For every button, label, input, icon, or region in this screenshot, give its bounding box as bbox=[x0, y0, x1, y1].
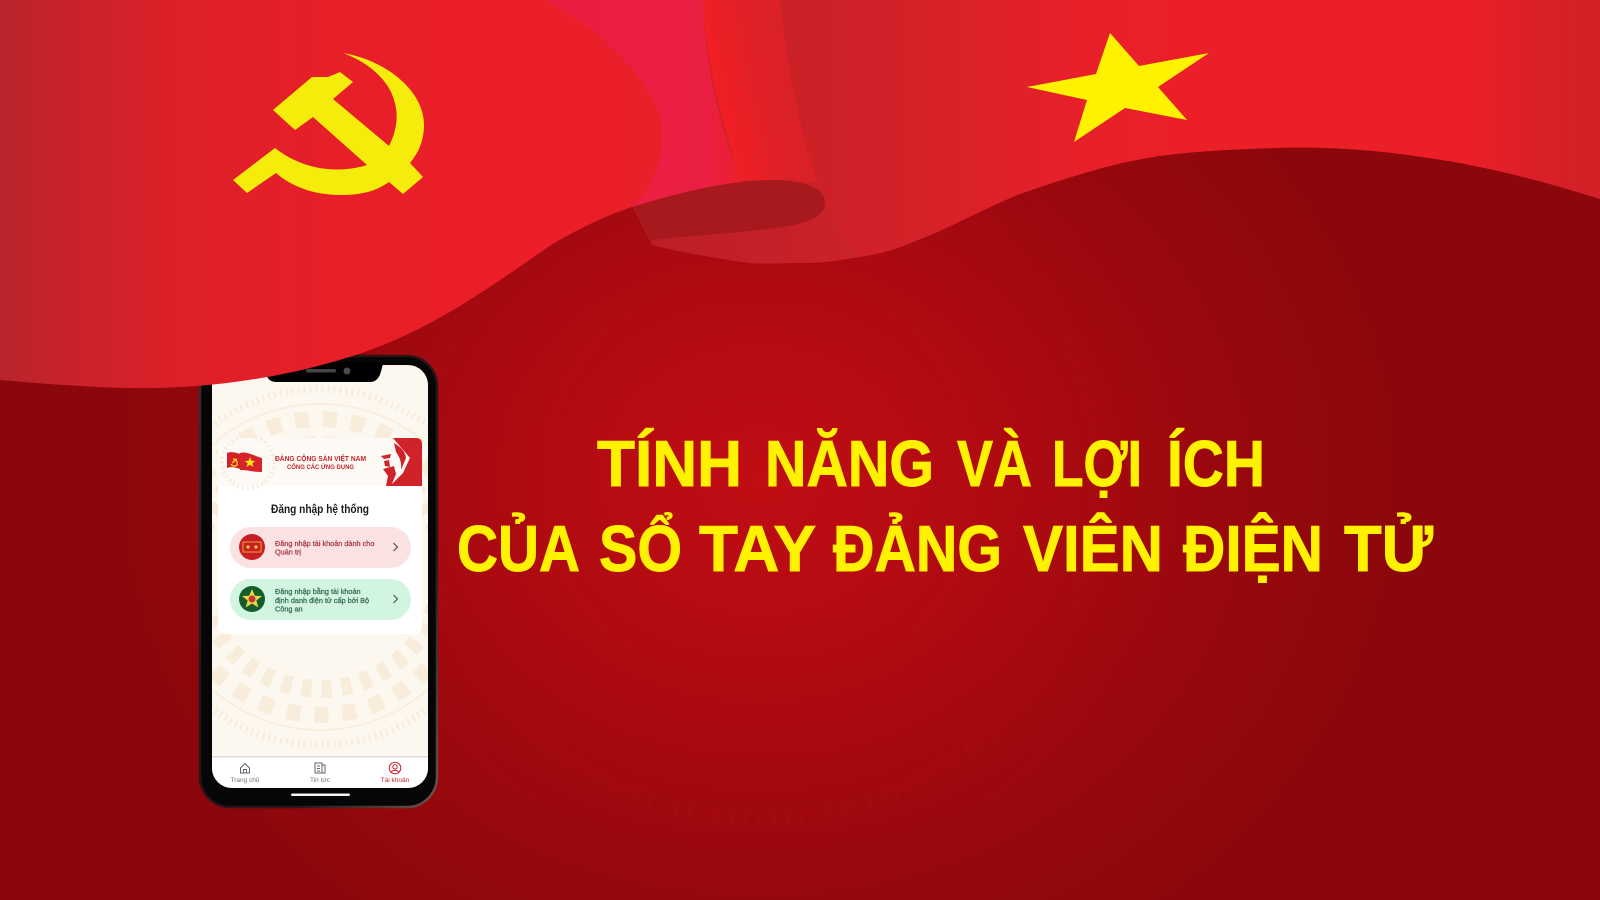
card heading: Đăng nhập hệ thống bbox=[271, 502, 369, 516]
title line 2: CỦA bbox=[457, 512, 580, 585]
chevron bbox=[394, 595, 398, 603]
admin login text: Quản trị bbox=[275, 548, 301, 556]
title bbox=[457, 427, 1433, 585]
app portal name: CỔNG CÁC ỨNG DỤNG bbox=[287, 464, 354, 471]
bottom navigation bar bbox=[212, 756, 428, 788]
right flag section bbox=[640, 0, 1600, 263]
title line 2: SỔ bbox=[599, 512, 682, 585]
speaker and camera bbox=[306, 368, 350, 374]
phone body bbox=[200, 356, 437, 807]
title line 1: NĂNG bbox=[765, 427, 934, 500]
title line 1: LỢI bbox=[1052, 427, 1142, 500]
police login text: định danh điện tử cấp bởi Bộ bbox=[275, 596, 369, 605]
icon: admin flag bbox=[239, 534, 265, 560]
left flag section bbox=[0, 0, 662, 388]
curl underside shadow bbox=[632, 180, 825, 246]
curl highlight bbox=[703, 0, 817, 182]
admin login text: Đăng nhập tài khoản dành cho bbox=[275, 539, 374, 548]
portrait emblem bbox=[381, 438, 422, 486]
title line 1: TÍNH bbox=[597, 427, 742, 500]
icon: twin flags bbox=[227, 452, 262, 472]
icon: home bbox=[240, 764, 250, 773]
title line 2: TAY bbox=[699, 512, 816, 585]
chevron bbox=[394, 543, 398, 551]
icon: hammer and sickle bbox=[233, 53, 424, 195]
label: Tin tức: Tin tức bbox=[310, 777, 331, 784]
title line 2: TỬ bbox=[1344, 512, 1433, 585]
label: Tài khoản: Tài khoản bbox=[381, 777, 410, 784]
app organization name: ĐẢNG CỘNG SẢN VIỆT NAM bbox=[275, 454, 366, 463]
admin login button bbox=[230, 527, 411, 568]
phone notch bbox=[262, 362, 384, 382]
home indicator bbox=[291, 794, 350, 796]
phone screen bbox=[212, 365, 428, 788]
icon: account bbox=[389, 762, 401, 774]
title line 2: VIÊN bbox=[1023, 512, 1163, 585]
title line 1 bbox=[597, 427, 1265, 500]
curl lower flap bbox=[652, 203, 860, 263]
waving party flag banner bbox=[0, 0, 1600, 388]
icon: yellow star bbox=[1027, 33, 1209, 142]
police identity login button bbox=[230, 579, 411, 620]
phone mockup bbox=[198, 354, 438, 808]
title line 2: ĐẢNG bbox=[833, 512, 1002, 585]
title line 1: VÀ bbox=[957, 427, 1032, 500]
title line 1: ÍCH bbox=[1167, 427, 1265, 500]
card header bbox=[218, 436, 422, 488]
curl pink fold bbox=[545, 0, 742, 207]
icon: news bbox=[315, 763, 325, 773]
police login text: Đăng nhập bằng tài khoản bbox=[275, 587, 361, 596]
icon: police badge bbox=[239, 586, 265, 612]
police login text: Công an bbox=[275, 604, 303, 614]
title line 2: ĐIỆN bbox=[1183, 512, 1323, 585]
label: Trang chủ: Trang chủ bbox=[230, 776, 260, 784]
title line 2 bbox=[457, 512, 1433, 585]
login card bbox=[218, 436, 422, 634]
